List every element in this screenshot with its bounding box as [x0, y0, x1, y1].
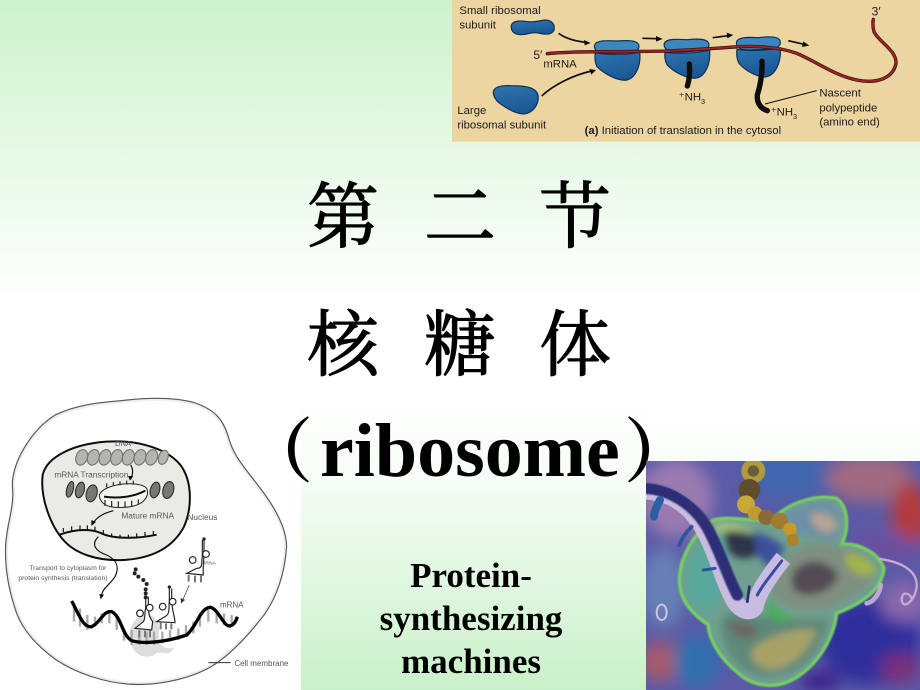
- ribosome 1: [594, 41, 640, 80]
- cell diagram labels: Nucleus: [187, 512, 217, 522]
- title line 2: 体: [539, 306, 611, 386]
- diagram labels: (a) Initiation of translation in the cytosol: [585, 125, 781, 137]
- polypeptide chains: [687, 61, 767, 111]
- diagram labels: 3′: [872, 4, 881, 18]
- transcription bubble: [65, 480, 176, 508]
- caption: protein-synthesizing machines: synthesizing: [380, 599, 563, 638]
- title line 3: ribosome: [243, 409, 694, 493]
- photo background: [646, 461, 920, 690]
- ribosome 3: [736, 37, 780, 77]
- diagram labels: Small ribosomal: [459, 5, 541, 17]
- title line 3: ribosome: ）: [624, 415, 694, 492]
- mature mRNA strand in nucleus: [59, 465, 189, 602]
- title line 2: 糖: [424, 306, 496, 386]
- cell diagram labels: Transport to cytoplasm for: [29, 565, 107, 572]
- diagram labels: ⁺NH: [679, 92, 701, 104]
- mRNA with codons: [72, 601, 237, 645]
- diagram background: [452, 0, 920, 142]
- ribosome 2: [664, 39, 710, 78]
- cell diagram labels: DNA: [115, 439, 132, 448]
- diagram labels: Nascent: [819, 88, 862, 100]
- ribosome shadow: [129, 615, 175, 657]
- tRNA anticodon stems: [139, 575, 201, 637]
- diagram labels: Large: [457, 105, 486, 117]
- title line 1: 第: [307, 178, 379, 258]
- amino acid chains: [133, 537, 206, 599]
- diagram labels: 3: [701, 97, 705, 106]
- tRNA stubs on strand: [654, 500, 660, 517]
- title line 1: 二: [424, 178, 496, 258]
- cell membrane leader line: [208, 661, 231, 664]
- mRNA strand: [547, 19, 896, 81]
- diagram: cell with translation: [0, 400, 301, 690]
- cell diagram labels: tRNA: [204, 561, 217, 567]
- cell diagram labels: Mature mRNA: [121, 510, 175, 520]
- title line 3: ribosome: （: [243, 415, 313, 492]
- cell diagram labels: [18, 439, 289, 668]
- title line 1: [307, 178, 611, 258]
- flow arrows: [542, 33, 817, 104]
- caption: protein-synthesizing machines: machines: [401, 642, 541, 681]
- nucleus: [42, 441, 190, 560]
- caption: protein-synthesizing machines: [380, 556, 563, 681]
- diagram labels: subunit: [459, 19, 497, 31]
- cell diagram labels: protein synthesis (translation): [18, 575, 108, 582]
- diagram labels: (amino end): [819, 116, 880, 128]
- caption: protein-synthesizing machines: Protein-: [410, 556, 532, 595]
- diagram labels: ⁺NH: [771, 107, 793, 119]
- diagram: initiation of translation in the cytosol: [452, 0, 920, 142]
- diagram labels: [457, 4, 881, 137]
- distant strand at right: [880, 559, 917, 604]
- title line 3: ribosome: ribosome: [320, 409, 620, 493]
- cell panel background: [0, 400, 301, 690]
- diagram labels: polypeptide: [819, 103, 877, 115]
- cell diagram labels: mRNA Transcription: [54, 469, 129, 479]
- diagram labels: 5′: [533, 48, 543, 62]
- mRNA strand through ribosome: [646, 488, 917, 620]
- diagram labels: ribosomal subunit: [457, 119, 547, 131]
- cell diagram labels: mRNA: [220, 600, 244, 609]
- small ribosomal subunit: [511, 20, 554, 35]
- large ribosomal subunit: [493, 86, 538, 114]
- diagram labels: mRNA: [543, 59, 577, 71]
- diagram labels: 3: [793, 112, 797, 121]
- background band behind caption: [301, 390, 647, 690]
- photo: ribosome illustration: [640, 452, 920, 690]
- ribosome body: [679, 497, 884, 685]
- DNA helix: [74, 448, 170, 467]
- cell membrane: [7, 400, 285, 683]
- title line 1: 节: [539, 178, 611, 258]
- tRNA molecules: [135, 540, 209, 630]
- small ring: [657, 605, 667, 620]
- amino acid chain: [737, 459, 799, 546]
- title line 2: [307, 306, 611, 386]
- cell diagram labels: Cell membrane: [234, 659, 289, 668]
- title line 2: 核: [307, 306, 381, 386]
